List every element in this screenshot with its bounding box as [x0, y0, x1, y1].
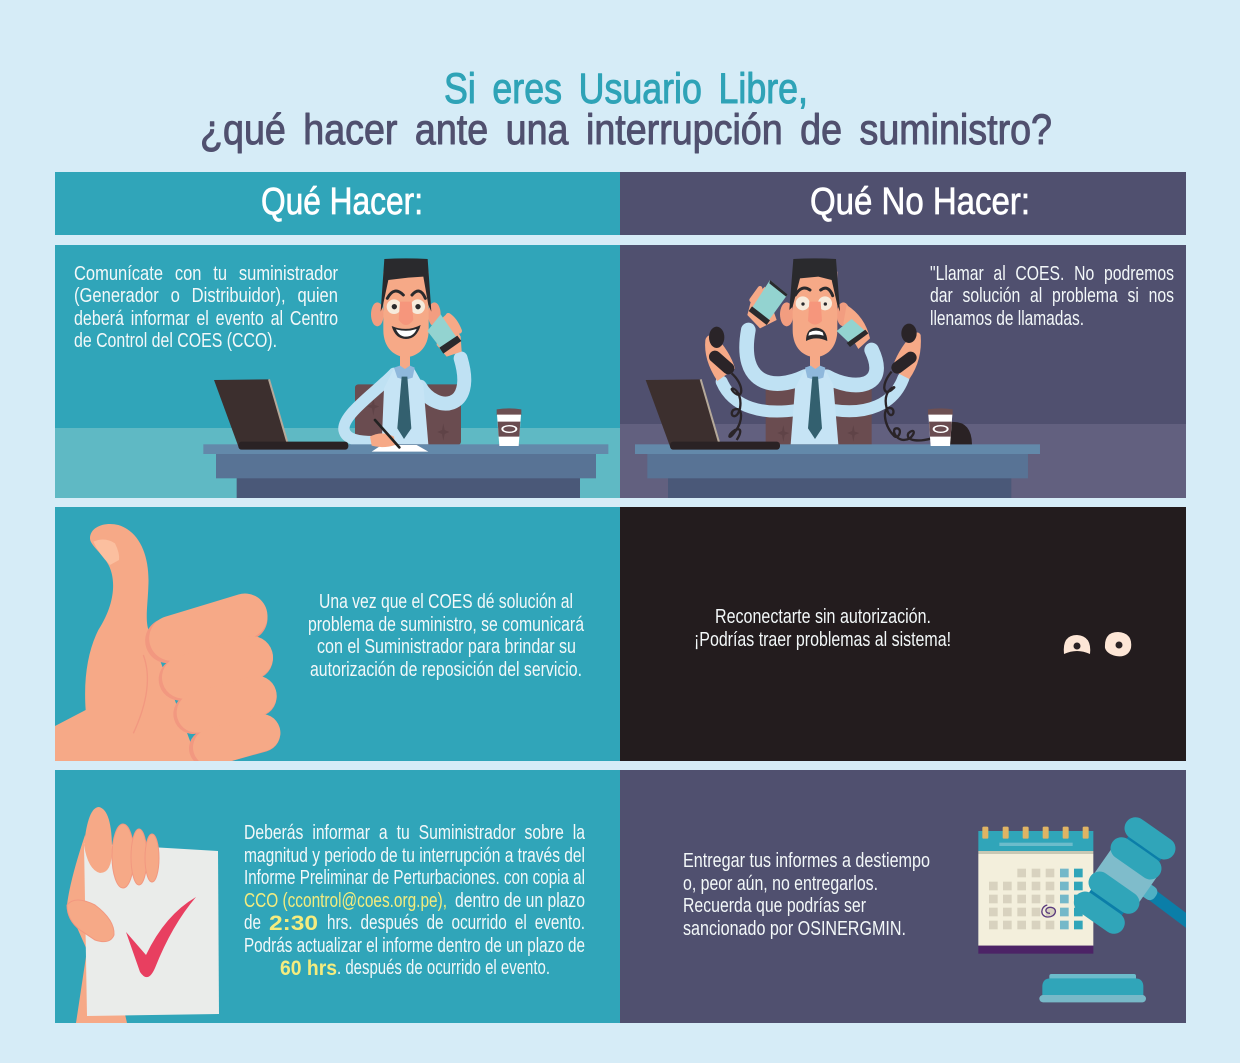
- text: inform administrator: de: [244, 911, 261, 934]
- text: inform administrator: CCO (ccontrol@coes.org.pe),: [244, 889, 447, 912]
- text: contact supplier: [74, 262, 338, 352]
- panel: inform administrator: [55, 770, 620, 1023]
- icon: calendar: [978, 827, 1093, 954]
- desk: [635, 444, 1040, 498]
- text: contact supplier: deberá informar el evento al Centro: [74, 307, 338, 330]
- text: authorization: con el Suministrador para brindar su: [317, 635, 576, 658]
- laptop: [214, 379, 348, 450]
- text: late reports: Recuerda que podrías ser: [683, 894, 866, 917]
- arms: [722, 330, 903, 412]
- illustration: stressed man with four arms: [635, 258, 1040, 498]
- text: inform administrator: 60 hrs: [280, 957, 337, 980]
- title: [200, 65, 1052, 154]
- panel: do not call COES: [620, 245, 1186, 498]
- right smartphone: [837, 305, 870, 349]
- text: late reports: [683, 849, 930, 940]
- text: inform administrator: . después de ocurrido el evento.: [337, 956, 550, 979]
- panel: contact supplier: [55, 245, 620, 498]
- text: late reports: Entregar tus informes a destiempo: [683, 849, 930, 872]
- header: Qué No Hacer: [620, 172, 1186, 235]
- panel: late reports: [620, 770, 1190, 1023]
- text: do not call: dar solución al problema si nos: [930, 284, 1174, 307]
- right handset: [892, 324, 921, 379]
- text: inform administrator: magnitud y periodo de tu interrupción a través del: [244, 844, 585, 867]
- text: reconnect warning: [694, 605, 951, 651]
- text: reconnect warning: Reconectarte sin autorización.: [715, 605, 931, 628]
- illustration: calm man on phone at desk: [203, 258, 608, 498]
- text: authorization: [308, 590, 584, 681]
- text: inform administrator: Podrás actualizar el informe dentro de un plazo de: [244, 934, 585, 957]
- text: inform administrator: Deberás informar a tu Suministrador sobre la: [244, 821, 585, 844]
- icon: hand holding checked paper: [67, 807, 219, 1023]
- text: authorization: Una vez que el COES dé solución al: [319, 590, 573, 613]
- text: do not call: llenamos de llamadas.: [930, 307, 1084, 330]
- text: inform administrator: hrs. después de ocurrido el evento.: [327, 911, 585, 934]
- left smartphone: [747, 280, 788, 328]
- panel: do not reconnect: [620, 507, 1186, 761]
- icon: gavel base: [1039, 974, 1146, 1002]
- icon: eyes in the dark: [1064, 632, 1131, 656]
- icon: gavel: [1074, 817, 1186, 934]
- header: Qué Hacer: [55, 172, 620, 235]
- desk: [203, 444, 608, 498]
- text: authorization: autorización de reposición del servicio.: [310, 658, 582, 681]
- text: do not call: [930, 262, 1174, 330]
- header: Qué Hacer: Qué Hacer:: [261, 181, 423, 223]
- head: [780, 258, 850, 357]
- laptop: [646, 379, 780, 450]
- phone base and cords: [729, 372, 972, 444]
- title: ¿qué hacer ante una interrupción de suministro?: [200, 106, 1052, 154]
- text: do not call: "Llamar al COES. No podremos: [930, 262, 1174, 285]
- coffee cup: [928, 408, 953, 446]
- icon: thumbs up hand: [55, 524, 262, 763]
- text: inform administrator: dentro de un plazo: [455, 889, 585, 912]
- left handset: [705, 327, 735, 381]
- text: inform administrator: [244, 821, 585, 980]
- text: contact supplier: (Generador o Distribuidor), quien: [74, 284, 338, 307]
- head: [371, 258, 441, 357]
- check mark: [126, 897, 196, 977]
- text: late reports: sancionado por OSINERGMIN.: [683, 917, 906, 940]
- text: inform administrator: Informe Preliminar de Perturbaciones. con copia al: [244, 866, 585, 889]
- coffee cup: [497, 408, 521, 446]
- text: inform administrator: 2:30: [269, 912, 318, 935]
- text: late reports: o, peor aún, no entregarlos.: [683, 872, 878, 895]
- title: Si eres Usuario Libre,: [444, 65, 808, 113]
- panel: wait for authorization: [55, 507, 620, 763]
- phone: [427, 313, 462, 357]
- text: contact supplier: de Control del COES (CCO).: [74, 329, 277, 352]
- header: Qué No Hacer: Qué No Hacer:: [810, 181, 1030, 223]
- text: reconnect warning: ¡Podrías traer problemas al sistema!: [694, 628, 951, 651]
- text: contact supplier: Comunícate con tu suministrador: [74, 262, 338, 285]
- text: authorization: problema de suministro, se comunicará: [308, 613, 584, 636]
